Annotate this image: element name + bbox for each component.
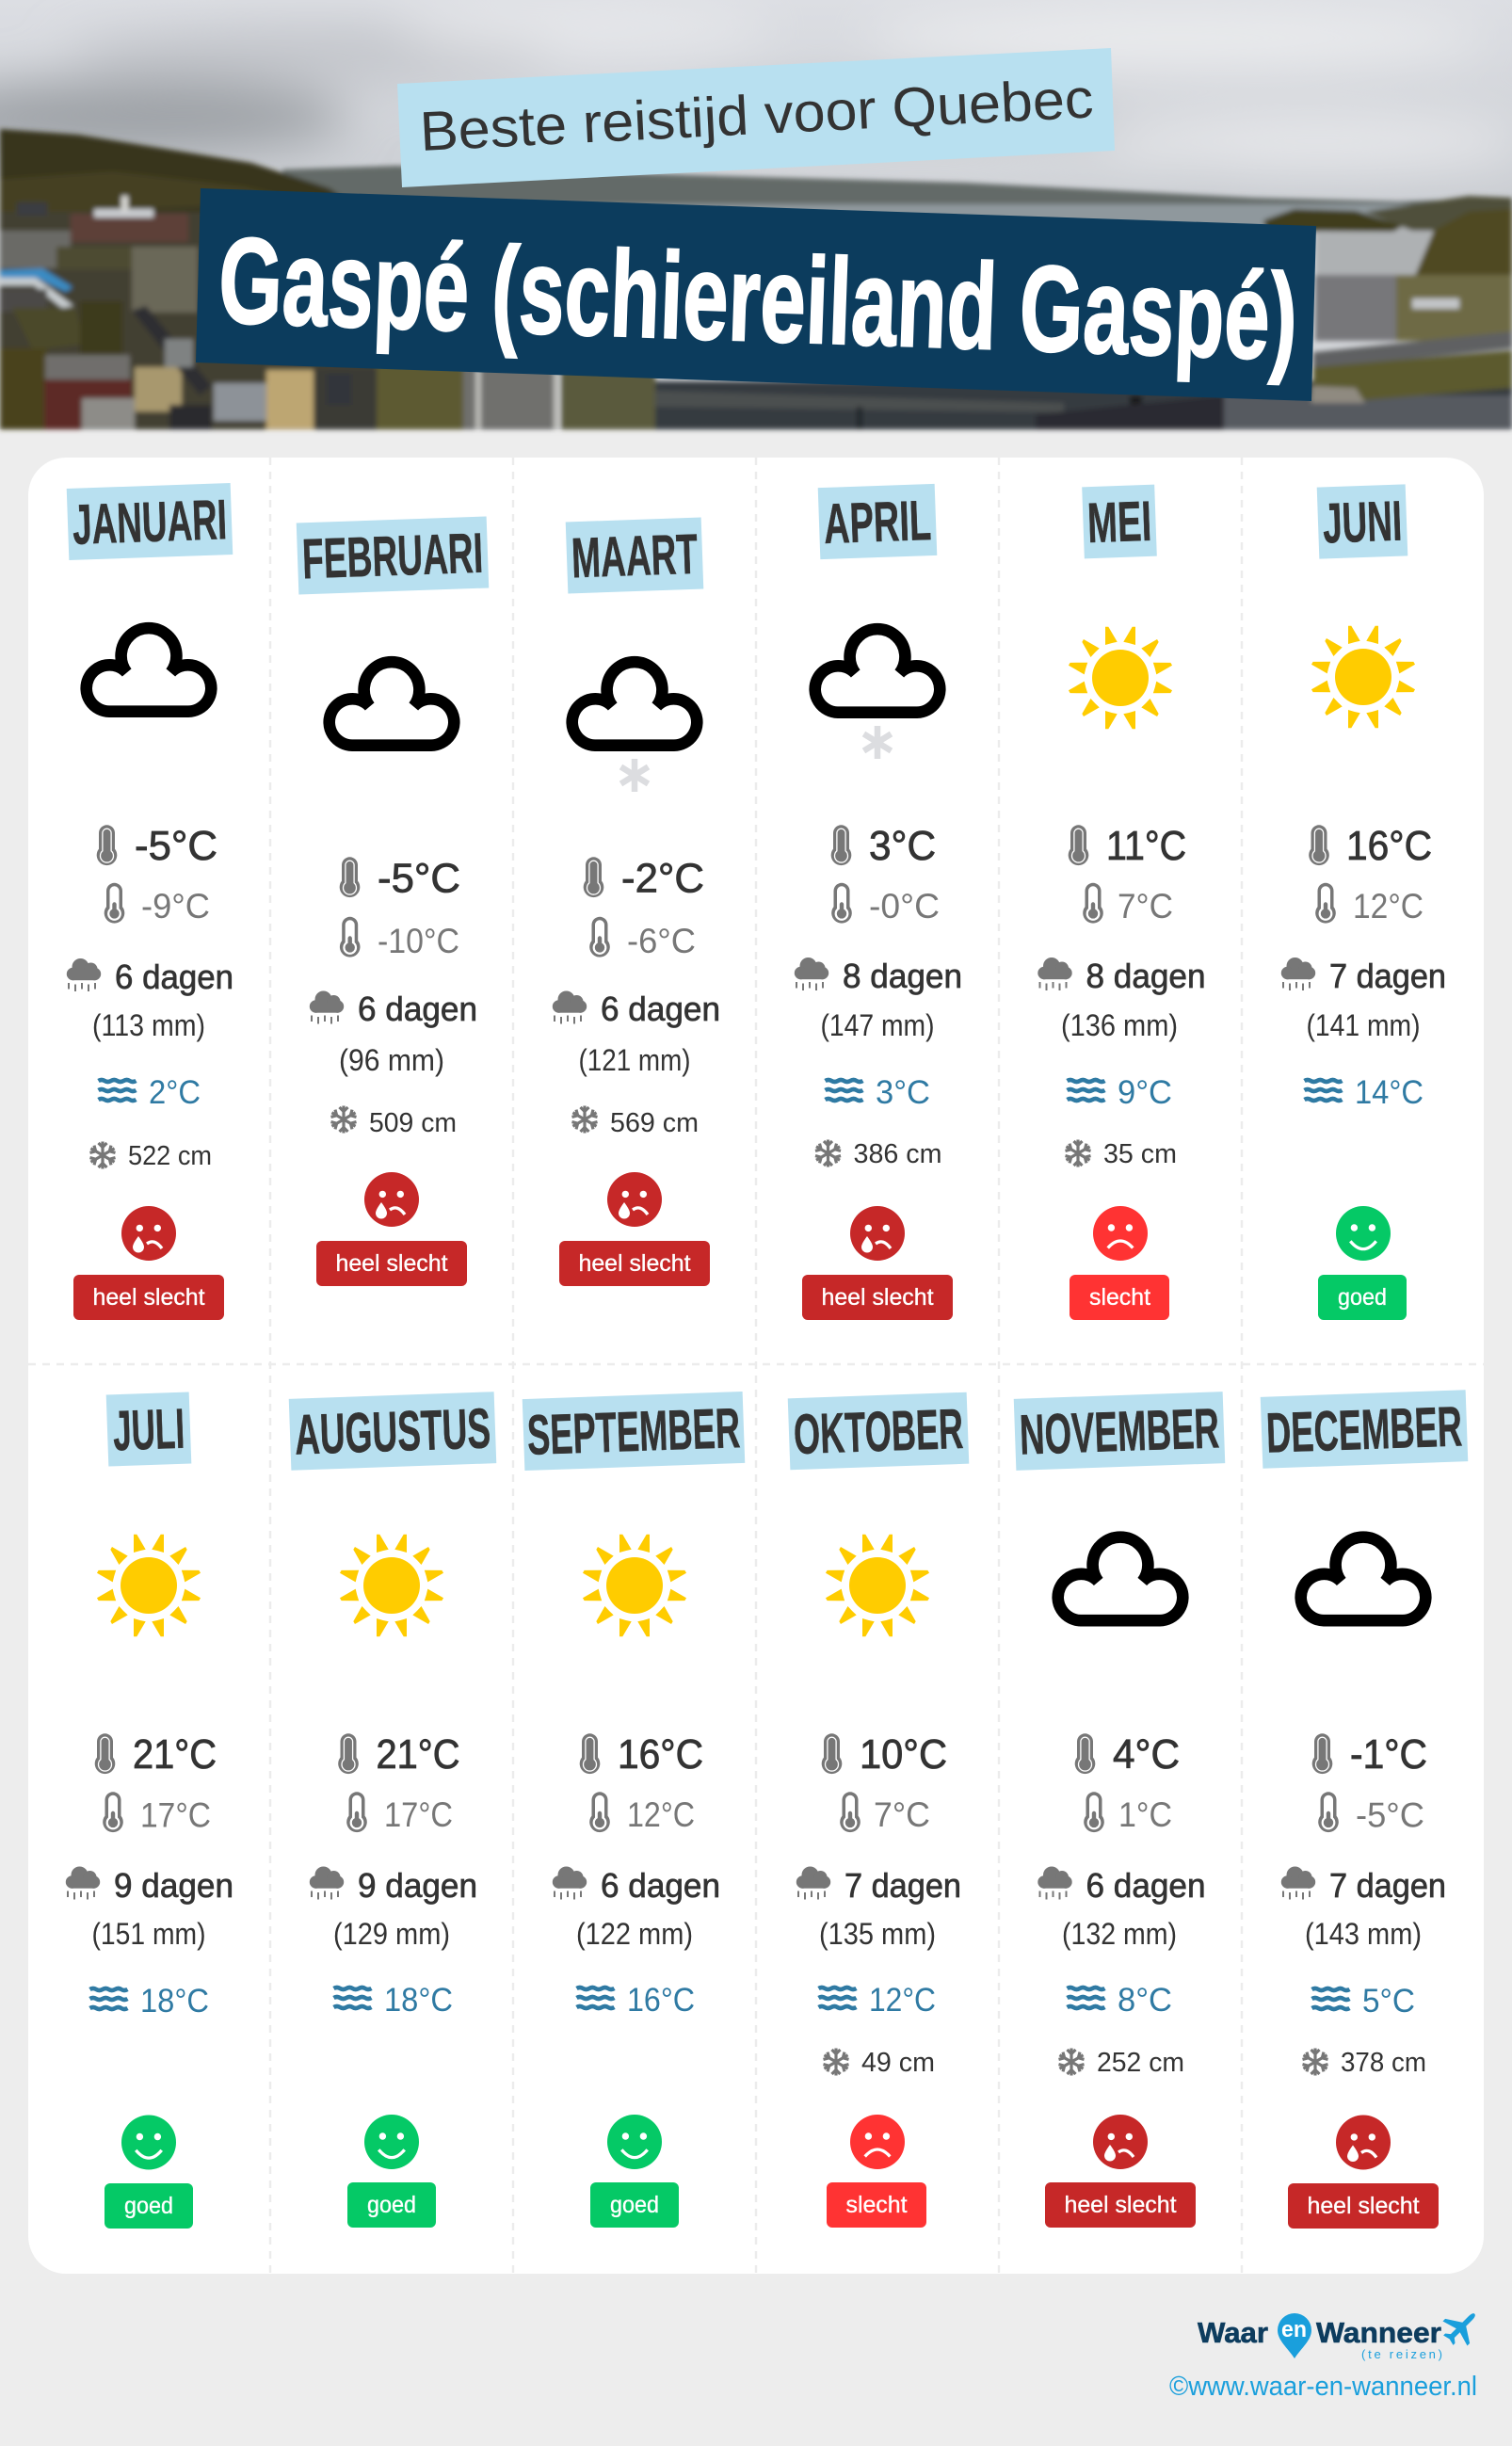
rain days bbox=[1281, 1866, 1446, 1905]
sea temperature: 14°C bbox=[1355, 1074, 1424, 1111]
month heading bbox=[289, 1392, 496, 1471]
rating badge: heel slecht bbox=[1307, 2193, 1420, 2219]
max temperature bbox=[338, 1731, 459, 1778]
snowfall bbox=[814, 1139, 941, 1169]
icon: sun bbox=[97, 1535, 201, 1636]
icon: cloud with snow bbox=[572, 662, 697, 792]
min temperature: 12°C bbox=[627, 1795, 695, 1834]
icon: rating face bbox=[121, 1206, 176, 1261]
rainfall: (136 mm) bbox=[1061, 1008, 1178, 1042]
rainfall: (121 mm) bbox=[578, 1043, 691, 1077]
icon: rating face bbox=[850, 1206, 905, 1261]
max temperature bbox=[95, 1731, 217, 1778]
website credit: ©www.waar-en-wanneer.nl bbox=[1169, 2372, 1477, 2402]
icon: rating face bbox=[850, 2115, 905, 2169]
rating badge bbox=[1070, 1275, 1169, 1320]
rainfall: (96 mm) bbox=[339, 1043, 444, 1077]
panel: maart bbox=[553, 518, 720, 1286]
min temperature bbox=[105, 883, 210, 925]
panel: juni bbox=[1281, 484, 1446, 1320]
month heading: JANUARI bbox=[72, 488, 228, 556]
snowfall: 35 cm bbox=[1103, 1139, 1177, 1169]
icon: cloud bbox=[1301, 1537, 1425, 1620]
min temperature bbox=[1318, 1792, 1424, 1834]
month heading: OKTOBER bbox=[793, 1397, 964, 1466]
rainfall: (135 mm) bbox=[819, 1917, 936, 1951]
rating badge: goed bbox=[367, 2192, 416, 2218]
max temperature: -5°C bbox=[378, 855, 460, 902]
icon: sun bbox=[1311, 626, 1415, 728]
min temperature bbox=[103, 1792, 211, 1834]
rating badge bbox=[802, 1275, 953, 1320]
min temperature: -6°C bbox=[627, 922, 696, 960]
rainfall: (132 mm) bbox=[1062, 1917, 1177, 1951]
rating badge bbox=[827, 2182, 926, 2228]
min temperature: 7°C bbox=[1118, 887, 1173, 925]
rating badge: goed bbox=[1338, 1284, 1387, 1311]
icon: cloud bbox=[330, 662, 454, 746]
sea temperature: 3°C bbox=[876, 1074, 930, 1111]
month heading bbox=[523, 1392, 745, 1471]
rating badge bbox=[590, 2182, 679, 2228]
rain days: 6 dagen bbox=[115, 957, 233, 996]
logo: Waar en Wanneer bbox=[1198, 2302, 1487, 2361]
icon: cloud with snow bbox=[815, 629, 940, 759]
icon: rating face bbox=[1093, 2115, 1148, 2169]
icon: rating face bbox=[607, 2115, 662, 2169]
max temperature: 21°C bbox=[133, 1731, 217, 1778]
icon: rating face bbox=[607, 1172, 662, 1227]
icon: location pin bbox=[1278, 2313, 1311, 2358]
snowfall bbox=[88, 1141, 212, 1171]
month heading bbox=[106, 1392, 191, 1467]
snowfall: 569 cm bbox=[610, 1108, 699, 1138]
header photo: aerial view of Gaspé bbox=[0, 0, 1512, 429]
min temperature: 1°C bbox=[1118, 1795, 1172, 1834]
rain days: 8 dagen bbox=[843, 957, 962, 995]
rain days: 8 dagen bbox=[1086, 957, 1205, 995]
rating badge: slecht bbox=[845, 2192, 908, 2218]
month heading bbox=[1082, 485, 1157, 558]
rain days: 7 dagen bbox=[1329, 1866, 1446, 1905]
panel: oktober bbox=[788, 1392, 969, 2228]
rating badge bbox=[559, 1241, 710, 1286]
rain days bbox=[67, 957, 233, 996]
rainfall: (147 mm) bbox=[821, 1008, 934, 1042]
max temperature bbox=[580, 1731, 703, 1778]
min temperature: -0°C bbox=[869, 887, 940, 925]
month heading: MAART bbox=[571, 523, 699, 589]
min temperature bbox=[831, 883, 940, 925]
max temperature bbox=[1312, 1731, 1427, 1778]
sea temperature: 2°C bbox=[149, 1074, 201, 1111]
rain days: 9 dagen bbox=[358, 1866, 477, 1905]
min temperature bbox=[1315, 883, 1424, 925]
max temperature: 16°C bbox=[1346, 823, 1432, 869]
logo: Waar en Wanneer: Wanneer bbox=[1316, 2316, 1441, 2349]
min temperature: -10°C bbox=[378, 922, 459, 960]
month heading bbox=[1014, 1392, 1225, 1471]
min temperature bbox=[346, 1792, 453, 1834]
panel: april bbox=[795, 484, 962, 1320]
rating badge bbox=[316, 1241, 467, 1286]
sea temperature: 9°C bbox=[1118, 1074, 1172, 1111]
max temperature bbox=[1309, 823, 1432, 869]
panel: november bbox=[1014, 1392, 1225, 2228]
sea temperature bbox=[1305, 1074, 1424, 1111]
rating badge bbox=[1045, 2182, 1196, 2228]
icon: location pin: en bbox=[1281, 2317, 1307, 2342]
panel: juli bbox=[66, 1392, 233, 2229]
month heading bbox=[1317, 484, 1407, 559]
max temperature bbox=[97, 823, 217, 869]
icon: airplane bbox=[1436, 2302, 1487, 2353]
icon: rating face bbox=[364, 1172, 419, 1227]
icon: sun bbox=[340, 1535, 443, 1636]
rating badge: heel slecht bbox=[335, 1250, 448, 1277]
rating badge: goed bbox=[124, 2193, 173, 2219]
min temperature bbox=[589, 917, 696, 960]
min temperature: 17°C bbox=[140, 1796, 211, 1834]
month heading: NOVEMBER bbox=[1019, 1396, 1220, 1467]
max temperature: -5°C bbox=[135, 823, 217, 869]
snowfall: 252 cm bbox=[1097, 2048, 1184, 2078]
max temperature bbox=[584, 855, 704, 902]
snowfall: 386 cm bbox=[853, 1139, 941, 1169]
panel: augustus bbox=[289, 1392, 496, 2228]
panel: december bbox=[1261, 1390, 1468, 2229]
min temperature: -9°C bbox=[141, 887, 210, 925]
month heading bbox=[788, 1392, 969, 1470]
snowfall: 509 cm bbox=[369, 1108, 457, 1138]
month heading bbox=[818, 484, 937, 559]
snowfall bbox=[1301, 2048, 1426, 2078]
rating badge: heel slecht bbox=[821, 1284, 934, 1311]
min temperature bbox=[1083, 883, 1173, 925]
rain days: 6 dagen bbox=[601, 1866, 720, 1905]
rating badge bbox=[1318, 1275, 1407, 1320]
month heading: FEBRUARI bbox=[301, 522, 484, 590]
icon: rating face bbox=[121, 2115, 176, 2169]
max temperature: 21°C bbox=[377, 1731, 459, 1778]
subtitle banner: Beste reistijd voor Quebec bbox=[418, 67, 1095, 163]
month heading: APRIL bbox=[823, 489, 932, 555]
sea temperature bbox=[90, 1983, 209, 2020]
month heading bbox=[67, 483, 233, 560]
rain days bbox=[1281, 957, 1446, 995]
sea temperature: 16°C bbox=[627, 1982, 695, 2019]
rain days: 7 dagen bbox=[1329, 957, 1446, 995]
rating badge: goed bbox=[610, 2192, 659, 2218]
max temperature: 11°C bbox=[1106, 823, 1186, 869]
snowfall bbox=[571, 1105, 699, 1138]
month heading: JUNI bbox=[1322, 490, 1403, 555]
month heading: SEPTEMBER bbox=[526, 1396, 741, 1467]
max temperature: 10°C bbox=[860, 1731, 947, 1778]
panel: mei bbox=[1037, 485, 1205, 1320]
rainfall: (143 mm) bbox=[1305, 1917, 1422, 1951]
sea temperature bbox=[1312, 1983, 1415, 2020]
rating badge bbox=[347, 2182, 436, 2228]
rain days: 6 dagen bbox=[601, 990, 720, 1028]
min temperature: 7°C bbox=[874, 1795, 930, 1834]
subtitle banner bbox=[397, 48, 1115, 187]
rainfall: (113 mm) bbox=[92, 1008, 205, 1042]
sea temperature bbox=[1068, 1074, 1172, 1111]
month heading: AUGUSTUS bbox=[294, 1396, 491, 1467]
rain days: 9 dagen bbox=[114, 1866, 233, 1905]
min temperature bbox=[1084, 1792, 1172, 1834]
min temperature: 17°C bbox=[384, 1795, 453, 1834]
rainfall: (122 mm) bbox=[576, 1917, 693, 1951]
sea temperature: 8°C bbox=[1118, 1982, 1172, 2019]
sea temperature bbox=[333, 1982, 453, 2019]
month heading: MEI bbox=[1086, 490, 1152, 555]
icon: sun bbox=[583, 1535, 686, 1636]
icon: rating face bbox=[1336, 1206, 1391, 1261]
sea temperature: 18°C bbox=[384, 1982, 453, 2019]
min temperature bbox=[589, 1792, 695, 1834]
min temperature: -5°C bbox=[1356, 1796, 1424, 1834]
sea temperature bbox=[825, 1074, 930, 1111]
snowfall: 522 cm bbox=[128, 1141, 212, 1171]
max temperature: -1°C bbox=[1350, 1731, 1427, 1778]
sea temperature: 5°C bbox=[1362, 1983, 1415, 2020]
max temperature bbox=[831, 823, 936, 869]
rain days: 7 dagen bbox=[844, 1866, 961, 1905]
icon: rating face bbox=[1093, 1206, 1148, 1261]
sea temperature bbox=[1068, 1982, 1172, 2019]
rating badge bbox=[73, 1275, 224, 1320]
rating badge: heel slecht bbox=[578, 1250, 691, 1277]
max temperature bbox=[1075, 1731, 1180, 1778]
month heading bbox=[297, 516, 489, 595]
logo: Waar en Wanneer: (te reizen) bbox=[1361, 2347, 1442, 2361]
sea temperature: 12°C bbox=[869, 1982, 936, 2019]
sea temperature bbox=[819, 1982, 936, 2019]
max temperature bbox=[822, 1731, 947, 1778]
min temperature bbox=[840, 1792, 930, 1834]
month heading: JULI bbox=[112, 1397, 185, 1462]
rainfall: (141 mm) bbox=[1307, 1008, 1420, 1042]
rating badge bbox=[1288, 2183, 1439, 2229]
rating badge: heel slecht bbox=[92, 1284, 205, 1311]
month heading bbox=[566, 518, 703, 593]
icon: sun bbox=[1069, 627, 1172, 729]
rainfall: (151 mm) bbox=[92, 1917, 205, 1951]
white calendar card bbox=[28, 458, 1484, 2274]
sea temperature: 18°C bbox=[140, 1983, 209, 2020]
rain days: 6 dagen bbox=[358, 990, 477, 1028]
snowfall: 378 cm bbox=[1341, 2048, 1426, 2078]
max temperature: 16°C bbox=[618, 1731, 703, 1778]
snowfall bbox=[822, 2048, 935, 2078]
rain days bbox=[796, 1866, 961, 1905]
icon: rating face bbox=[1336, 2115, 1391, 2169]
icon: sun bbox=[826, 1535, 929, 1636]
max temperature: -2°C bbox=[621, 855, 704, 902]
rain days: 6 dagen bbox=[1086, 1866, 1205, 1905]
max temperature bbox=[340, 855, 460, 902]
logo: Waar en Wanneer: Waar bbox=[1198, 2316, 1268, 2349]
sea temperature bbox=[98, 1074, 201, 1111]
panel: februari bbox=[297, 516, 489, 1286]
icon: cloud bbox=[87, 628, 211, 712]
snowfall: 49 cm bbox=[861, 2048, 935, 2078]
icon: cloud bbox=[1058, 1537, 1182, 1620]
min temperature bbox=[340, 917, 459, 960]
icon: rating face bbox=[364, 2115, 419, 2169]
rating badge: heel slecht bbox=[1064, 2192, 1177, 2218]
snowfall bbox=[330, 1105, 457, 1138]
rainfall: (129 mm) bbox=[333, 1917, 450, 1951]
panel: september bbox=[523, 1392, 745, 2228]
panel: januari bbox=[67, 483, 233, 1320]
rating badge: slecht bbox=[1089, 1284, 1150, 1311]
max temperature: 4°C bbox=[1113, 1731, 1180, 1778]
rating badge bbox=[105, 2183, 193, 2229]
max temperature: 3°C bbox=[869, 823, 936, 869]
max temperature bbox=[1069, 823, 1186, 869]
sea temperature bbox=[576, 1982, 695, 2019]
min temperature: 12°C bbox=[1353, 887, 1424, 925]
snowfall bbox=[1064, 1139, 1177, 1169]
snowfall bbox=[1057, 2048, 1184, 2078]
